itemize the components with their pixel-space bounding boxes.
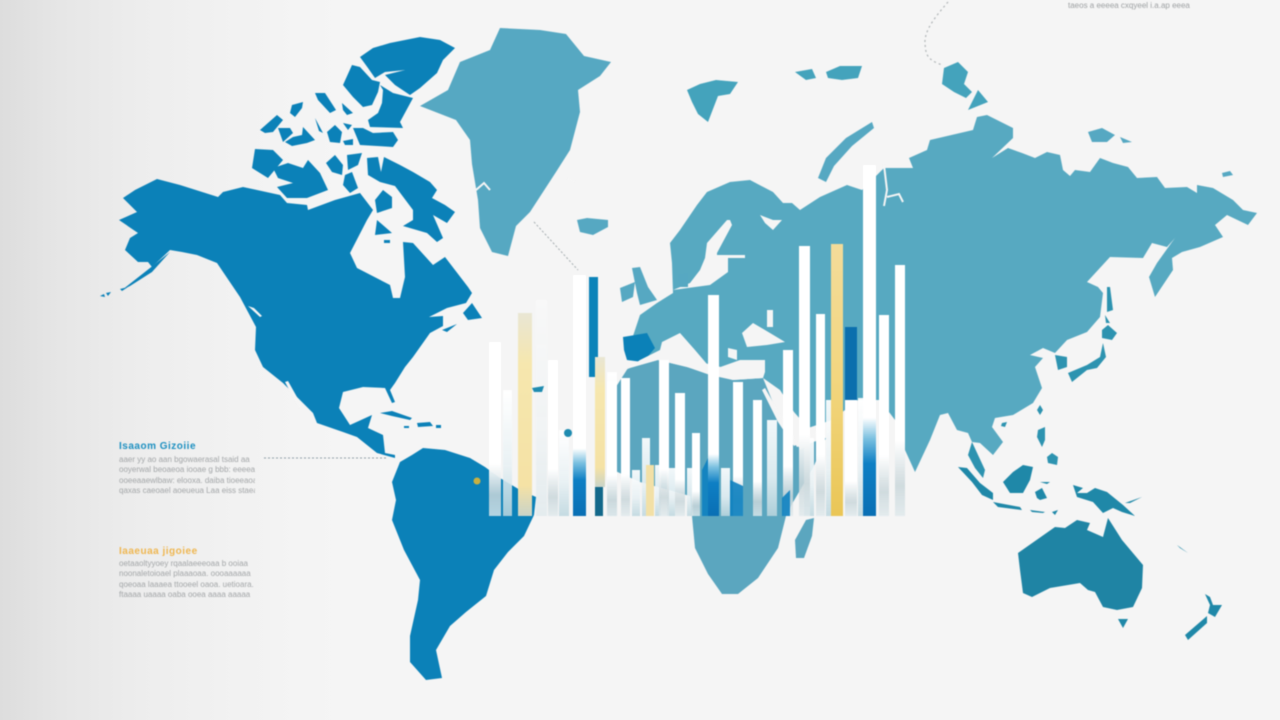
map: Baltic and White seas bbox=[673, 215, 782, 290]
text block: orange callout bbox=[118, 546, 254, 599]
Alaska peninsula and Aleutians bbox=[100, 252, 170, 297]
map: Spain bbox=[623, 333, 655, 362]
body: blue callout: aaer yy ao aan bgowaerasal tsaid aa bbox=[119, 455, 250, 464]
body: blue callout bbox=[118, 455, 256, 495]
map: Taiwan, Hainan and Philippines bbox=[1001, 405, 1058, 465]
map: New Zealand, Tasmania and New Caledonia bbox=[1118, 545, 1222, 640]
map: Svalbard bbox=[687, 80, 738, 122]
white bars bbox=[489, 246, 905, 516]
Newfoundland and Nova Scotia bbox=[442, 303, 482, 332]
map: Africa bbox=[612, 360, 826, 594]
Axel Heiberg Island bbox=[343, 65, 380, 107]
body: orange callout bbox=[118, 559, 254, 599]
connector: Greenland leader bbox=[534, 222, 578, 270]
map: Madagascar bbox=[795, 518, 814, 558]
map: Mediterranean and inland seas bbox=[625, 310, 828, 450]
Devon Island bbox=[368, 85, 413, 128]
blue bars bbox=[589, 277, 598, 377]
map: Iceland bbox=[577, 218, 608, 235]
map: Australia bbox=[1018, 518, 1143, 610]
map: South America bbox=[392, 448, 536, 680]
bar chart bbox=[474, 165, 905, 516]
body: orange callout: ftaaaa uaaaa oaba ooea aaaa aaaaa bbox=[119, 590, 250, 599]
blue-based bars bbox=[573, 165, 876, 516]
back faded bars bbox=[503, 300, 863, 516]
map: Novaya Zemlya bbox=[818, 122, 874, 182]
connector: top right leader bbox=[925, 2, 948, 65]
yellow location marker bbox=[474, 478, 480, 484]
Caribbean dot markers bbox=[532, 386, 572, 437]
map: Indonesia and New Guinea bbox=[958, 465, 1142, 516]
heading: orange callout: Iaaeuaa jigoiee bbox=[119, 546, 198, 557]
heading: blue callout: Isaaom Gizoiie bbox=[119, 441, 196, 452]
blue base accents bbox=[702, 458, 790, 516]
map: Japan and Sakhalin bbox=[1068, 287, 1117, 382]
body: orange callout: noonaletoioael plaaaoaa. oooaaaaaa bbox=[119, 569, 251, 578]
Baffin Island bbox=[367, 157, 455, 242]
map: Denmark bbox=[678, 273, 688, 287]
text block: top right caption: taeos a eeeea cxqyeel i.a.ap eeea bbox=[1068, 1, 1190, 10]
body: blue callout: ooeeaaewlbaw: elooxa. daiba tioeeaoa bbox=[119, 476, 255, 485]
map: United Kingdom and Ireland bbox=[620, 267, 657, 305]
text block: blue callout bbox=[118, 440, 256, 495]
yellow bars bbox=[518, 313, 532, 516]
connector: left callout leader bbox=[264, 457, 388, 459]
map: Malay peninsula and Korea bbox=[968, 355, 1067, 478]
Southampton and Caribbean islands bbox=[375, 190, 441, 428]
Queen Elizabeth islands bbox=[260, 93, 398, 147]
Banks and Victoria islands bbox=[252, 149, 362, 198]
map: Greenland bbox=[420, 28, 611, 256]
mainland North America bbox=[119, 179, 472, 458]
Ellesmere Island bbox=[360, 37, 455, 95]
body: orange callout: qoeoaa laaaea ttooeel oaoa. uetioara. bbox=[119, 580, 254, 589]
body: orange callout: oetaaoltyyoey rqaalaeeeoaa b ooiaa bbox=[119, 559, 248, 568]
hudson and pacific slits bbox=[248, 306, 302, 408]
map: Siberian islands bbox=[1088, 128, 1233, 177]
map: Ob inlet bbox=[884, 165, 903, 206]
Greenland fjords bbox=[476, 178, 574, 190]
map: North America bbox=[100, 37, 482, 458]
map: Eurasia bbox=[630, 115, 1257, 472]
map: small arctic islands bbox=[795, 62, 988, 110]
